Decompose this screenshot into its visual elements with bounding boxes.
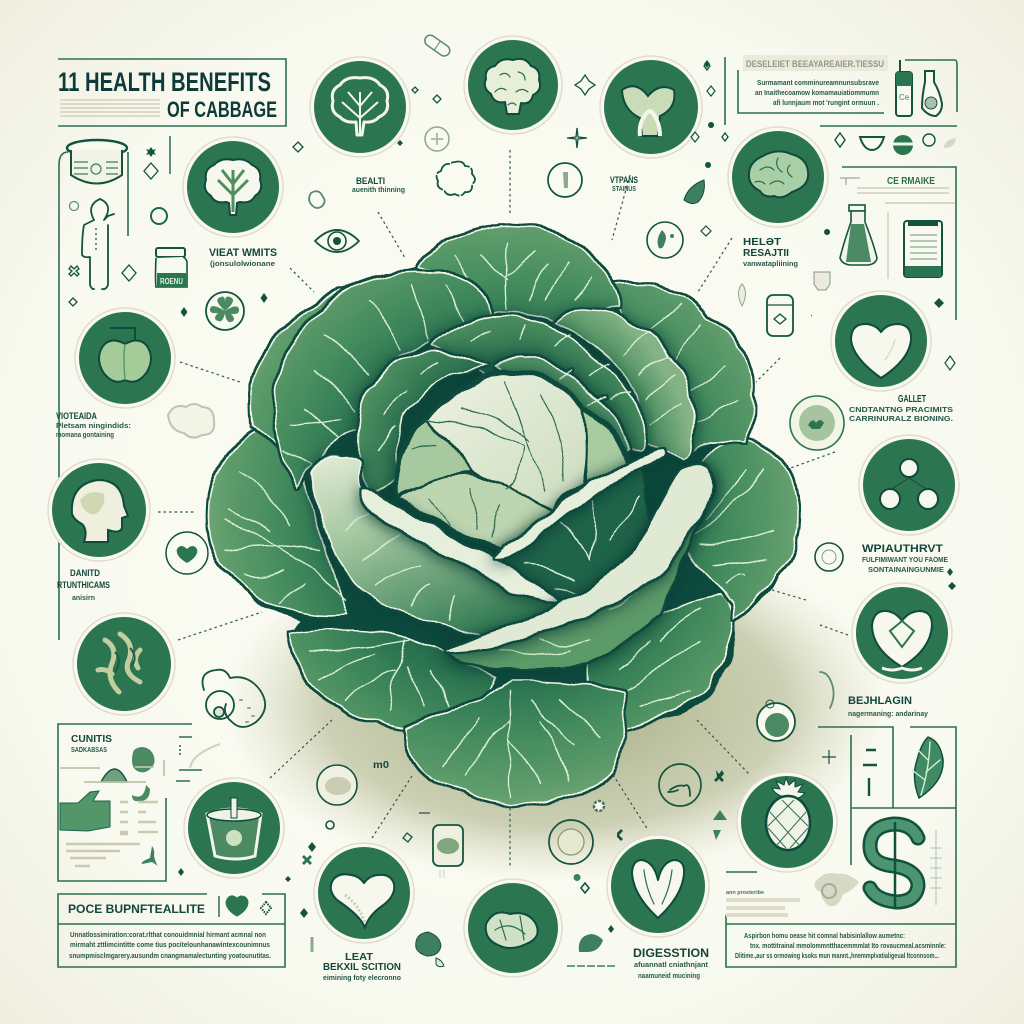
note lines xyxy=(726,900,800,915)
title line 1: 11 HEALTH BENEFITS xyxy=(58,67,271,97)
circle badge: cauliflower xyxy=(464,36,562,134)
benefit: left label: momana gontaining xyxy=(56,430,114,439)
icon: leaf xyxy=(684,180,704,204)
icon: cylinder xyxy=(67,140,127,184)
body text: Unnatlossimiration:corat.rlthat conouidmnial hirmant acmnal non xyxy=(70,930,266,939)
icon: small leaf ring xyxy=(425,127,449,151)
circle badge: pineapple xyxy=(737,772,837,872)
caption: (jonsulolwionane xyxy=(210,259,275,268)
icon: gear xyxy=(594,801,604,811)
cabbage illustration xyxy=(208,226,798,803)
cabbage ground shadow xyxy=(225,530,885,880)
leaf: right lower xyxy=(686,440,798,618)
benefit: gallet: CARRINURALZ BIONING. xyxy=(849,414,953,423)
cabbage head xyxy=(398,373,628,552)
circle badge: heart right xyxy=(831,291,931,391)
subheading: SADKABSAS xyxy=(71,745,107,754)
heading: POCE BUPNFTEALLITE xyxy=(68,904,205,916)
leaf fold: front band xyxy=(445,466,711,652)
leaf: inner left xyxy=(359,352,488,494)
dots xyxy=(708,122,944,316)
panel: left frame with cylinder and body xyxy=(59,140,128,640)
head veins xyxy=(412,380,565,538)
heading: DESELEIET BEEAYAREAIER.TIESSU xyxy=(746,59,884,70)
benefit: gallet xyxy=(849,394,953,423)
icon: bottle xyxy=(767,295,793,336)
label: VIEAT WMITS xyxy=(209,247,277,259)
body text: Aspirbon homu oease hit comnal habisinlallow aumetnc: xyxy=(744,931,905,940)
icon: walking figure xyxy=(142,846,158,866)
leaf: bottom right xyxy=(589,595,733,731)
caption: CNDTANTNG PRACIMITS xyxy=(849,405,953,414)
bottle icons: Ce xyxy=(899,93,910,102)
label: DIGESSTION xyxy=(633,946,709,960)
circle badge: twisted strands xyxy=(73,613,175,715)
caption: STAINUS xyxy=(612,184,636,193)
leaf small xyxy=(579,934,603,952)
icon: round face xyxy=(790,396,844,450)
icon: pale blob xyxy=(168,404,214,438)
small icons left middle xyxy=(166,404,231,574)
small icons bottom centre right xyxy=(549,764,727,933)
label: HELƏT xyxy=(743,237,781,248)
strip of small icons xyxy=(820,126,957,155)
chart rows xyxy=(66,802,158,866)
benefit: digestion xyxy=(633,946,709,980)
body text: afi lunnjaum mot 'rungint ormuun . xyxy=(773,98,879,107)
benefit: left lower label: RTUNTHICAMS xyxy=(57,580,110,591)
icon: tomato xyxy=(132,747,154,772)
benefit: wealth xyxy=(862,543,948,574)
body text: Surmamant comminureamnunsubsrave xyxy=(757,78,879,87)
leaf: front left xyxy=(311,456,558,640)
leaf fold: left band xyxy=(360,490,560,604)
icon: hand ring xyxy=(647,222,683,258)
leaf: right middle xyxy=(556,310,695,459)
benefit: label right lower xyxy=(848,695,929,718)
label: BEJHLAGIN xyxy=(848,695,912,707)
benefit: health research: RESAJTII xyxy=(743,248,789,259)
icon: seed outline xyxy=(309,191,325,208)
label: WPIAUTHRVT xyxy=(862,543,943,555)
benefit: vital fruits left xyxy=(209,247,277,268)
circle badge: leaf outline xyxy=(310,57,410,157)
body text: mirmaht zttlimcintitte come tius pocitelounhanawintexcounimnus xyxy=(70,940,270,949)
label: GALLET xyxy=(898,394,926,405)
icon: jar: ROENU xyxy=(160,277,183,286)
benefit: leaf xyxy=(323,951,401,982)
icon: heart xyxy=(227,897,247,915)
icon: stomach ring xyxy=(659,764,701,806)
caption: afuannatl cniathnjant xyxy=(634,960,708,969)
circle badge: cabbage leaves xyxy=(464,879,562,977)
circle badge: bok choy xyxy=(600,56,702,158)
icon: plant ring xyxy=(317,765,357,805)
heading band xyxy=(743,55,888,71)
heading: CUNITIS xyxy=(71,734,112,745)
stray bars xyxy=(176,737,202,781)
panel: bottom left banner xyxy=(58,894,285,967)
body text xyxy=(735,931,946,960)
body text: snumpmisclmgarery.ausundm cnangmamalectunting yoatounutitas. xyxy=(69,951,271,960)
icon: double ring xyxy=(549,820,593,864)
leaf: front right xyxy=(445,465,713,669)
caption: vanwatapliining xyxy=(743,259,798,268)
circle badge: cup xyxy=(184,778,284,878)
leaf: bottom centre xyxy=(406,681,625,803)
icon: eye xyxy=(315,230,359,252)
body text xyxy=(69,930,271,960)
caption: eimining foty elecronno xyxy=(323,973,401,982)
icon: ring xyxy=(815,543,843,571)
small outline icons top xyxy=(309,33,728,258)
circle badge: heart leaf xyxy=(852,583,952,683)
caption: FULFIMIWANT YOU FAOME xyxy=(862,555,948,564)
circle badge: brain xyxy=(728,127,828,227)
circle badge: head profile xyxy=(48,459,150,561)
leaf: centre dark xyxy=(500,470,655,625)
icon: pill xyxy=(423,33,452,58)
leaf: right back xyxy=(612,283,752,459)
circle badge: white leaves xyxy=(607,835,709,937)
small icons bottom centre left xyxy=(178,760,463,952)
icon: jar xyxy=(433,825,463,866)
sparkles xyxy=(412,62,728,148)
body text: tnx. mottitrainal mmolommntthacemmmlat Ito rovaucmeal.acsminnle: xyxy=(750,941,946,950)
icon: tube ring xyxy=(548,163,582,197)
icon: body figure xyxy=(82,199,114,289)
icon: flask xyxy=(840,205,877,265)
benefit: digestion: naamuneid mucining xyxy=(638,971,700,980)
leaf fold: inner right band xyxy=(494,451,666,558)
circle badge: leaf tree xyxy=(183,137,283,237)
circle badge: three berries xyxy=(859,435,959,535)
icon: feather xyxy=(738,284,746,306)
icon: leaf xyxy=(912,737,943,798)
icon: rose xyxy=(815,873,859,906)
panel: lab flask and clipboard xyxy=(840,167,956,320)
divider xyxy=(218,896,220,917)
heading: CE RMAIKE xyxy=(887,176,935,187)
icon: clipboard xyxy=(904,221,942,277)
circle badge: heart bottom xyxy=(314,843,414,943)
cabbage dark base silhouette xyxy=(214,227,794,800)
icon: box xyxy=(814,272,830,290)
leaf: left upper xyxy=(275,272,492,486)
label: LEAT xyxy=(345,951,374,963)
leaf: inner crescent xyxy=(496,355,628,480)
icons: right lower fruit xyxy=(725,568,956,741)
head: lower xyxy=(398,475,552,552)
leaf: inner top xyxy=(433,317,646,451)
small marks xyxy=(863,750,877,796)
benefit: top centre right label xyxy=(610,175,638,193)
title line 2: OF CABBAGE xyxy=(167,97,277,122)
small decorations left xyxy=(69,136,303,317)
head: right side xyxy=(583,410,628,495)
icon: jar xyxy=(156,248,187,287)
icon: drop xyxy=(218,457,231,478)
icon: hook xyxy=(132,785,150,801)
benefit: wealth: SONTAINAINGUNMIE xyxy=(868,565,944,574)
label: VIOTEAIDA xyxy=(56,411,97,421)
body text xyxy=(755,78,879,107)
head: left wedge xyxy=(398,420,473,495)
caption: Pletsam ningindids: xyxy=(56,421,131,430)
caption: nagermaning: andarinay xyxy=(848,709,929,718)
icon: sparkle xyxy=(261,902,271,914)
body text: an Inaithecoamow komamauiatiommumn xyxy=(755,88,879,97)
benefit: left label xyxy=(56,411,131,439)
benefit: health research xyxy=(743,237,798,268)
panel: bottom right frame xyxy=(726,727,956,967)
circle badge: apple xyxy=(75,308,175,408)
label: DANITD xyxy=(70,568,100,579)
icon: tent xyxy=(101,769,127,782)
label: VTPANS xyxy=(610,175,638,186)
small icons right xyxy=(691,86,955,370)
icon: mini glyph: m0 xyxy=(373,760,389,771)
head: main xyxy=(426,373,586,510)
marks xyxy=(419,812,430,814)
dotted connector lines xyxy=(158,150,848,868)
label: BEALTI xyxy=(356,176,385,187)
scale marks xyxy=(930,830,942,905)
icon: flower outline xyxy=(437,162,475,196)
note heading: ann prosteribe xyxy=(726,890,764,896)
icon: heart ring xyxy=(166,532,208,574)
caption: auenith thinning xyxy=(352,185,405,194)
panel: top right description xyxy=(725,55,957,125)
leaf: top xyxy=(418,226,619,323)
benefit: left lower label xyxy=(57,568,110,602)
caption: anisirn xyxy=(72,593,95,602)
title fine print xyxy=(60,100,160,116)
shapes xyxy=(574,810,727,881)
panel: bottom left card xyxy=(58,724,220,881)
icon: hand xyxy=(60,791,110,831)
icon: dollar sign xyxy=(870,822,918,908)
icon: small leaf with seed xyxy=(416,932,444,967)
benefit: leaf: BEKXIL SCITION xyxy=(323,961,401,973)
icon: stomach outline xyxy=(202,670,265,727)
leaf: bottom left xyxy=(289,630,496,728)
leaf: left lower xyxy=(208,428,348,616)
leaf: left back xyxy=(251,292,380,460)
icon: clover xyxy=(206,292,244,330)
benefit: top centre left label xyxy=(352,176,405,194)
title panel xyxy=(58,59,286,126)
bottle icons xyxy=(896,60,957,116)
body text: Dlitime.,aur ss ormowing ksoks mun mannt.,hnemmplvatialigeual ltconnsom... xyxy=(735,951,939,960)
